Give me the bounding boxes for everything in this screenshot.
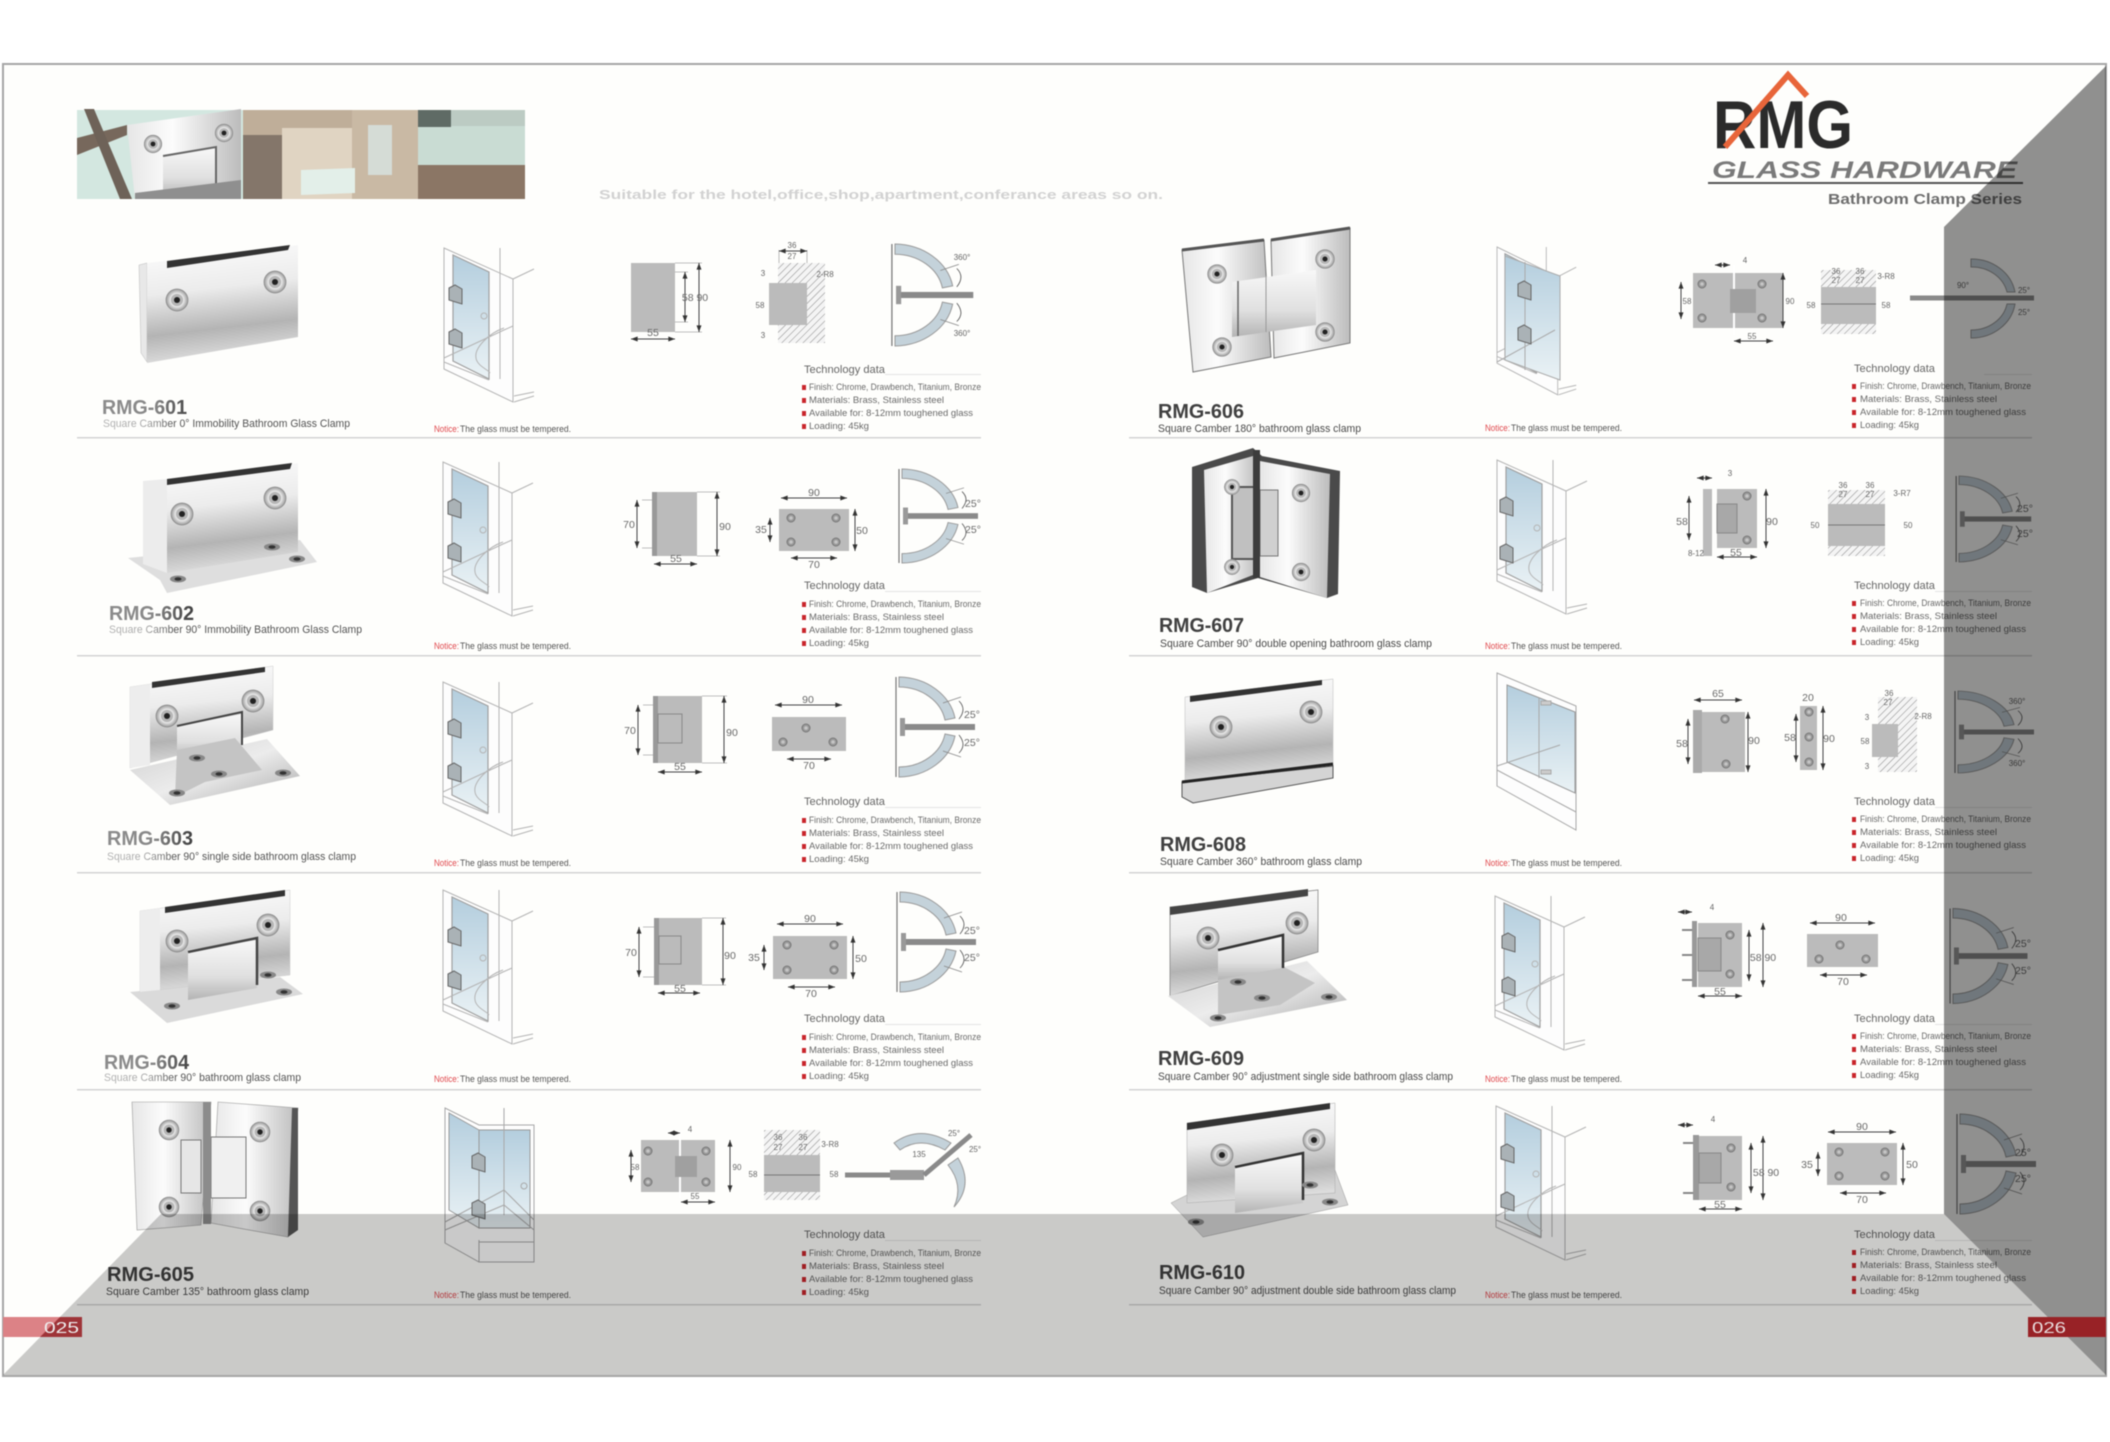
product photo: RMG-609 (1168, 889, 1347, 1027)
dimension drawing: section: 3 (761, 269, 766, 278)
model name: RMG-601 (102, 397, 187, 419)
dimension drawing: front: 55 (1730, 547, 1742, 559)
technology data: Materials: Brass, Stainless steel (809, 1261, 944, 1271)
notice: Notice: (1485, 1290, 1510, 1300)
technology data: Technology data (1854, 796, 1936, 808)
technology data (802, 1229, 981, 1297)
description: Square Camber 90° bathroom glass clamp (104, 1072, 301, 1084)
rotation diagram (845, 1129, 981, 1207)
description: Square Camber 90° single side bathroom glass clamp (107, 851, 356, 863)
dimension drawing: front: 58 90 (1750, 952, 1776, 964)
technology data (802, 1013, 981, 1081)
dimension drawing: section: 27 (774, 1143, 783, 1152)
rotation diagram: 360° (2009, 759, 2025, 768)
dimension drawing: front: 4 (1710, 903, 1715, 912)
rotation diagram: 135 (912, 1150, 926, 1159)
technology data: Loading: 45kg (809, 1287, 869, 1297)
dimension drawing: side: 20 (1802, 692, 1814, 704)
technology data: Loading: 45kg (809, 638, 869, 648)
notice: Notice: (1485, 423, 1510, 433)
dimension drawing: front (623, 492, 731, 565)
product photo: RMG-604 (130, 890, 303, 1023)
model name: RMG-610 (1159, 1262, 1245, 1284)
technology data: Technology data (1854, 363, 1936, 375)
technology data: Materials: Brass, Stainless steel (1860, 827, 1997, 837)
panel: RMG-603 (107, 666, 981, 868)
dimension drawing: front: 55 (670, 553, 682, 565)
dimension drawing: section: 27 (1866, 490, 1875, 499)
dimension drawing: section (1861, 689, 1932, 772)
dimension drawing: side (1784, 692, 1835, 770)
rotation diagram (1910, 259, 2034, 338)
rotation diagram: 25° (965, 498, 981, 510)
technology data: Available for: 8-12mm toughened glass (1860, 1273, 2027, 1283)
dimension drawing: section: 36 (788, 241, 797, 250)
dimension drawing: front: 90 (724, 950, 736, 962)
description: Square Camber 90° double opening bathroom glass clamp (1160, 638, 1432, 650)
dimension drawing: section: 3 (1865, 713, 1870, 722)
technology data: Technology data (804, 580, 886, 592)
technology data: Finish: Chrome, Drawbench, Titanium, Bronze (809, 1032, 981, 1042)
dimension drawing: section: 2-R8 (1914, 712, 1932, 721)
rotation diagram: 25° (2015, 938, 2031, 950)
technology data (1852, 1229, 2032, 1296)
notice: The glass must be tempered. (1511, 1290, 1622, 1300)
technology data: Technology data (804, 1013, 886, 1025)
tagline: Suitable for the hotel,office,shop,apartment,conferance areas so on. (599, 187, 1163, 202)
dimension drawing: section: 36 (1832, 267, 1841, 276)
shower diagram (1497, 460, 1587, 614)
product photo: RMG-610 (1171, 1103, 1348, 1237)
model name: RMG-608 (1160, 834, 1246, 856)
description: Square Camber 90° Immobility Bathroom Glass Clamp (109, 624, 362, 636)
dimension drawing: section: 50 (1811, 521, 1820, 530)
panel: RMG-601 (102, 241, 981, 434)
technology data: Technology data (1854, 1013, 1936, 1025)
technology data: Materials: Brass, Stainless steel (809, 612, 944, 622)
dimension drawing: front (1681, 256, 1795, 341)
dimension drawing: front (1676, 688, 1760, 773)
panel: RMG-608 (1160, 673, 2034, 868)
technology data: Loading: 45kg (1860, 1070, 1919, 1080)
technology data: Available for: 8-12mm toughened glass (1860, 840, 2027, 850)
notice: Notice: (1485, 858, 1510, 868)
model name: RMG-602 (109, 603, 194, 625)
product photo: RMG-602 (128, 463, 317, 593)
technology data: Available for: 8-12mm toughened glass (809, 408, 974, 418)
dimension drawing: front (624, 696, 738, 773)
dimension drawing: section: 27 (1839, 490, 1848, 499)
rotation diagram: 25° (964, 709, 980, 721)
technology data: Materials: Brass, Stainless steel (1860, 611, 1997, 621)
rotation diagram: 25° (2017, 503, 2033, 515)
technology data: Finish: Chrome, Drawbench, Titanium, Bronze (809, 599, 981, 609)
dimension drawing: base: 70 (1837, 976, 1849, 988)
page number 025 (3, 1317, 82, 1337)
dimension drawing: front: 58 (1676, 516, 1688, 528)
panel: RMG-607 (1159, 448, 2033, 651)
rotation diagram: 25° (2018, 308, 2030, 317)
dimension drawing: front (1678, 1115, 1779, 1211)
dimension drawing: front: 4 (688, 1125, 693, 1134)
dimension drawing: front: 8-12 (1688, 549, 1705, 558)
notice: The glass must be tempered. (460, 1074, 571, 1084)
notice: The glass must be tempered. (1511, 1074, 1622, 1084)
technology data: Materials: Brass, Stainless steel (809, 1045, 944, 1055)
dimension drawing: front: 58 (631, 1163, 640, 1172)
dimension drawing: section: 58 (756, 301, 765, 310)
technology data: Finish: Chrome, Drawbench, Titanium, Bronze (1860, 1031, 2031, 1041)
technology data: Loading: 45kg (809, 1071, 869, 1081)
dimension drawing: front (631, 1125, 742, 1202)
technology data (802, 364, 981, 431)
technology data: Materials: Brass, Stainless steel (809, 395, 944, 405)
dimension drawing: base: 35 (748, 952, 760, 964)
dimension drawing: section: 36 (1866, 481, 1875, 490)
rotation diagram: 25° (969, 1145, 981, 1154)
dimension drawing: front: 90 (1766, 516, 1778, 528)
technology data: Available for: 8-12mm toughened glass (809, 1058, 974, 1068)
dimension drawing: front: 3 (1728, 469, 1733, 478)
rotation diagram: 25° (2017, 528, 2033, 540)
panel: RMG-606 (1158, 228, 2034, 435)
dimension drawing: front: 55 (674, 983, 686, 995)
dimension drawing: section: 3-R8 (821, 1140, 839, 1149)
dimension drawing: front: 90 (1748, 735, 1760, 747)
dimension drawing: front: 55 (647, 327, 659, 339)
technology data (1852, 580, 2032, 647)
dimension drawing: section: 2-R8 (816, 270, 834, 279)
dimension drawing: front (1676, 469, 1778, 559)
notice: The glass must be tempered. (460, 641, 571, 651)
dimension drawing: section: 58 (749, 1170, 758, 1179)
rotation diagram: 360° (2009, 697, 2025, 706)
technology data: Loading: 45kg (809, 421, 869, 431)
description: Square Camber 180° bathroom glass clamp (1158, 423, 1361, 435)
shower diagram (1497, 673, 1576, 830)
notice: The glass must be tempered. (1511, 423, 1622, 433)
dimension drawing: base: 70 (805, 988, 817, 1000)
dimension drawing: section: 36 (1885, 689, 1894, 698)
description: Square Camber 90° adjustment double side bathroom glass clamp (1159, 1285, 1456, 1297)
product photo: RMG-608 (1182, 679, 1333, 803)
technology data: Technology data (804, 1229, 886, 1241)
model name: RMG-607 (1159, 615, 1244, 637)
shower diagram (443, 890, 533, 1044)
dimension drawing: front: 55 (674, 761, 686, 773)
dimension drawing: section: 27 (1884, 698, 1893, 707)
rotation diagram: 25° (2015, 1147, 2031, 1159)
shower diagram (443, 462, 533, 616)
technology data: Materials: Brass, Stainless steel (1860, 394, 1997, 404)
rotation diagram: 90° (1957, 281, 1969, 290)
rotation diagram (896, 677, 980, 777)
page number 026 (2028, 1317, 2106, 1337)
product photo: RMG-601 (139, 245, 298, 363)
product photo: RMG-606 (1182, 228, 1350, 372)
dimension drawing: front: 90 (726, 727, 738, 739)
dimension drawing: base: 70 (808, 559, 820, 571)
technology data (1852, 363, 2032, 430)
product photo: RMG-603 (130, 666, 300, 805)
dimension drawing: section (756, 241, 834, 343)
description: Square Camber 90° adjustment single side bathroom glass clamp (1158, 1071, 1453, 1083)
dimension drawing: section: 3 (761, 331, 766, 340)
technology data: Loading: 45kg (1860, 853, 1919, 863)
dimension drawing: side: 90 (1823, 733, 1835, 745)
dimension drawing: section: 58 (1807, 301, 1816, 310)
dimension drawing: section: 27 (1832, 276, 1841, 285)
dimension drawing: section: 36 (799, 1133, 808, 1142)
notice: The glass must be tempered. (1511, 641, 1622, 651)
dimension drawing: base (1801, 1121, 1918, 1206)
dimension drawing: base: 90 (1835, 912, 1847, 924)
panel: RMG-602 (109, 462, 981, 651)
dimension drawing: base (772, 694, 846, 772)
rotation diagram: 25° (2018, 286, 2030, 295)
technology data: Available for: 8-12mm toughened glass (1860, 407, 2027, 417)
dimension drawing: section: 58 (1882, 301, 1891, 310)
rotation diagram: 25° (964, 737, 980, 749)
panel: RMG-610 (1159, 1103, 2036, 1300)
bottom grey overlay band (3, 1214, 2106, 1375)
dimension drawing: front: 90 (719, 521, 731, 533)
product photo: RMG-607 (1192, 448, 1340, 598)
notice: The glass must be tempered. (1511, 858, 1622, 868)
notice: Notice: (434, 858, 459, 868)
technology data: Available for: 8-12mm toughened glass (809, 1274, 974, 1284)
logo: Bathroom Clamp Series (1828, 192, 2022, 208)
technology data: Finish: Chrome, Drawbench, Titanium, Bronze (1860, 1247, 2031, 1257)
model name: RMG-604 (104, 1052, 190, 1074)
dimension drawing: section (1807, 267, 1895, 334)
rotation diagram: 25° (964, 952, 980, 964)
dimension drawing: front: 90 (733, 1163, 742, 1172)
technology data: Available for: 8-12mm toughened glass (809, 625, 974, 635)
notice: Notice: (434, 1074, 459, 1084)
dimension drawing: base: 50 (1906, 1159, 1918, 1171)
technology data: Available for: 8-12mm toughened glass (1860, 1057, 2027, 1067)
description: Square Camber 360° bathroom glass clamp (1160, 856, 1362, 868)
technology data: Loading: 45kg (809, 854, 869, 864)
notice: Notice: (1485, 641, 1510, 651)
dimension drawing: section (749, 1130, 839, 1200)
shower diagram (1497, 247, 1576, 395)
technology data: Loading: 45kg (1860, 420, 1919, 430)
panel: RMG-604 (104, 890, 981, 1084)
dimension drawing: front: 58 90 (1753, 1167, 1779, 1179)
dimension drawing: base: 50 (856, 525, 868, 537)
notice: Notice: (434, 641, 459, 651)
rotation diagram (897, 892, 980, 992)
shower diagram (1495, 896, 1585, 1050)
dimension drawing: section: 58 (830, 1170, 839, 1179)
rotation diagram (1957, 1114, 2036, 1214)
technology data: Loading: 45kg (1860, 1286, 1919, 1296)
model name: RMG-605 (107, 1264, 194, 1286)
dimension drawing: front: 58 90 (682, 292, 708, 304)
description: Square Camber 135° bathroom glass clamp (106, 1286, 309, 1298)
dimension drawing: section: 3-R8 (1877, 272, 1895, 281)
separators (77, 437, 2032, 1306)
technology data: Materials: Brass, Stainless steel (1860, 1044, 1997, 1054)
dimension drawing: base: 70 (1856, 1194, 1868, 1206)
dimension drawing: base: 35 (1801, 1159, 1813, 1171)
notice: Notice: (1485, 1074, 1510, 1084)
dimension drawing: base: 35 (755, 524, 767, 536)
rotation diagram (1955, 691, 2034, 773)
dimension drawing: section: 27 (788, 252, 797, 261)
dimension drawing: section (1811, 481, 1913, 556)
technology data (1852, 1013, 2032, 1080)
dimension drawing: section: 50 (1904, 521, 1913, 530)
dimension drawing: base: 90 (1856, 1121, 1868, 1133)
model name: RMG-606 (1158, 401, 1244, 423)
logo: GLASS HARDWARE (1712, 157, 2018, 184)
technology data: Finish: Chrome, Drawbench, Titanium, Bronze (809, 1248, 981, 1258)
dimension drawing: section: 36 (1839, 481, 1848, 490)
dimension drawing: base: 90 (804, 913, 816, 925)
dimension drawing: section: 36 (774, 1133, 783, 1142)
right grey overlay panel (1944, 66, 2106, 1375)
rotation diagram (892, 244, 973, 346)
technology data: Technology data (804, 364, 886, 376)
dimension drawing: section: 3 (1865, 762, 1870, 771)
dimension drawing: front: 70 (623, 519, 635, 531)
shower diagram (1496, 1106, 1586, 1260)
rotation diagram: 25° (2015, 965, 2031, 977)
dimension drawing: section: 27 (799, 1143, 808, 1152)
technology data: Loading: 45kg (1860, 637, 1919, 647)
dimension drawing: front (1678, 903, 1776, 998)
logo (1708, 75, 2023, 208)
rotation diagram: 25° (964, 925, 980, 937)
page number 025: 025 (44, 1320, 79, 1337)
product photo: RMG-605 (132, 1102, 298, 1237)
technology data: Finish: Chrome, Drawbench, Titanium, Bronze (809, 382, 981, 392)
dimension drawing: section: 27 (1856, 276, 1865, 285)
technology data: Finish: Chrome, Drawbench, Titanium, Bronze (809, 815, 981, 825)
rotation diagram: 360° (954, 253, 970, 262)
dimension drawing: base: 90 (808, 487, 820, 499)
rotation diagram (1956, 476, 2033, 562)
notice: The glass must be tempered. (460, 858, 571, 868)
notice: The glass must be tempered. (460, 424, 571, 434)
model name: RMG-609 (1158, 1048, 1244, 1070)
dimension drawing: front (625, 918, 736, 995)
technology data: Finish: Chrome, Drawbench, Titanium, Bronze (1860, 598, 2031, 608)
rotation diagram: 25° (965, 524, 981, 536)
dimension drawing: front: 55 (691, 1192, 700, 1201)
notice: Notice: (434, 1290, 459, 1300)
dimension drawing: front: 70 (625, 947, 637, 959)
shower diagram (445, 1108, 534, 1262)
rotation diagram (1950, 908, 2031, 1004)
technology data: Materials: Brass, Stainless steel (809, 828, 944, 838)
description: Square Camber 0° Immobility Bathroom Glass Clamp (103, 418, 350, 430)
technology data: Available for: 8-12mm toughened glass (809, 841, 974, 851)
dimension drawing: base (1807, 912, 1878, 988)
dimension drawing: front: 70 (624, 725, 636, 737)
dimension drawing: front (631, 263, 708, 339)
dimension drawing: front: 4 (1743, 256, 1748, 265)
dimension drawing: section: 36 (1856, 267, 1865, 276)
dimension drawing: front: 4 (1711, 1115, 1716, 1124)
dimension drawing: front: 55 (1714, 1199, 1726, 1211)
rotation diagram: 25° (2015, 1173, 2031, 1185)
dimension drawing: base (755, 487, 868, 571)
dimension drawing: front: 58 (1683, 297, 1692, 306)
technology data: Technology data (1854, 1229, 1936, 1241)
technology data: Available for: 8-12mm toughened glass (1860, 624, 2027, 634)
technology data: Finish: Chrome, Drawbench, Titanium, Bronze (1860, 814, 2031, 824)
shower diagram (443, 682, 533, 836)
dimension drawing: front: 55 (1748, 332, 1757, 341)
panel: RMG-609 (1158, 889, 2032, 1084)
rotation diagram (899, 469, 981, 563)
dimension drawing: base: 70 (803, 760, 815, 772)
dimension drawing: section: 3-R7 (1893, 489, 1911, 498)
technology data: Finish: Chrome, Drawbench, Titanium, Bronze (1860, 381, 2031, 391)
notice: Notice: (434, 424, 459, 434)
technology data (1852, 796, 2032, 863)
technology data (802, 796, 981, 864)
dimension drawing: section: 58 (1861, 737, 1870, 746)
rotation diagram: 360° (954, 329, 970, 338)
dimension drawing: side: 58 (1784, 732, 1796, 744)
dimension drawing: front: 65 (1712, 688, 1724, 700)
technology data: Technology data (804, 796, 886, 808)
technology data (802, 580, 981, 648)
dimension drawing: base: 50 (855, 953, 867, 965)
model name: RMG-603 (107, 828, 193, 850)
dimension drawing: front: 58 (1676, 738, 1688, 750)
logo: RMG (1713, 87, 1853, 163)
dimension drawing: front: 90 (1786, 297, 1795, 306)
shower diagram (444, 248, 534, 402)
technology data: Technology data (1854, 580, 1936, 592)
dimension drawing: front: 55 (1714, 986, 1726, 998)
panel: RMG-605 (106, 1102, 981, 1300)
dimension drawing: base: 90 (802, 694, 814, 706)
notice: The glass must be tempered. (460, 1290, 571, 1300)
technology data: Materials: Brass, Stainless steel (1860, 1260, 1997, 1270)
dimension drawing: base (748, 913, 867, 1000)
banner photo strip (77, 109, 525, 199)
page number 026: 026 (2032, 1320, 2066, 1337)
rotation diagram: 25° (948, 1129, 960, 1138)
